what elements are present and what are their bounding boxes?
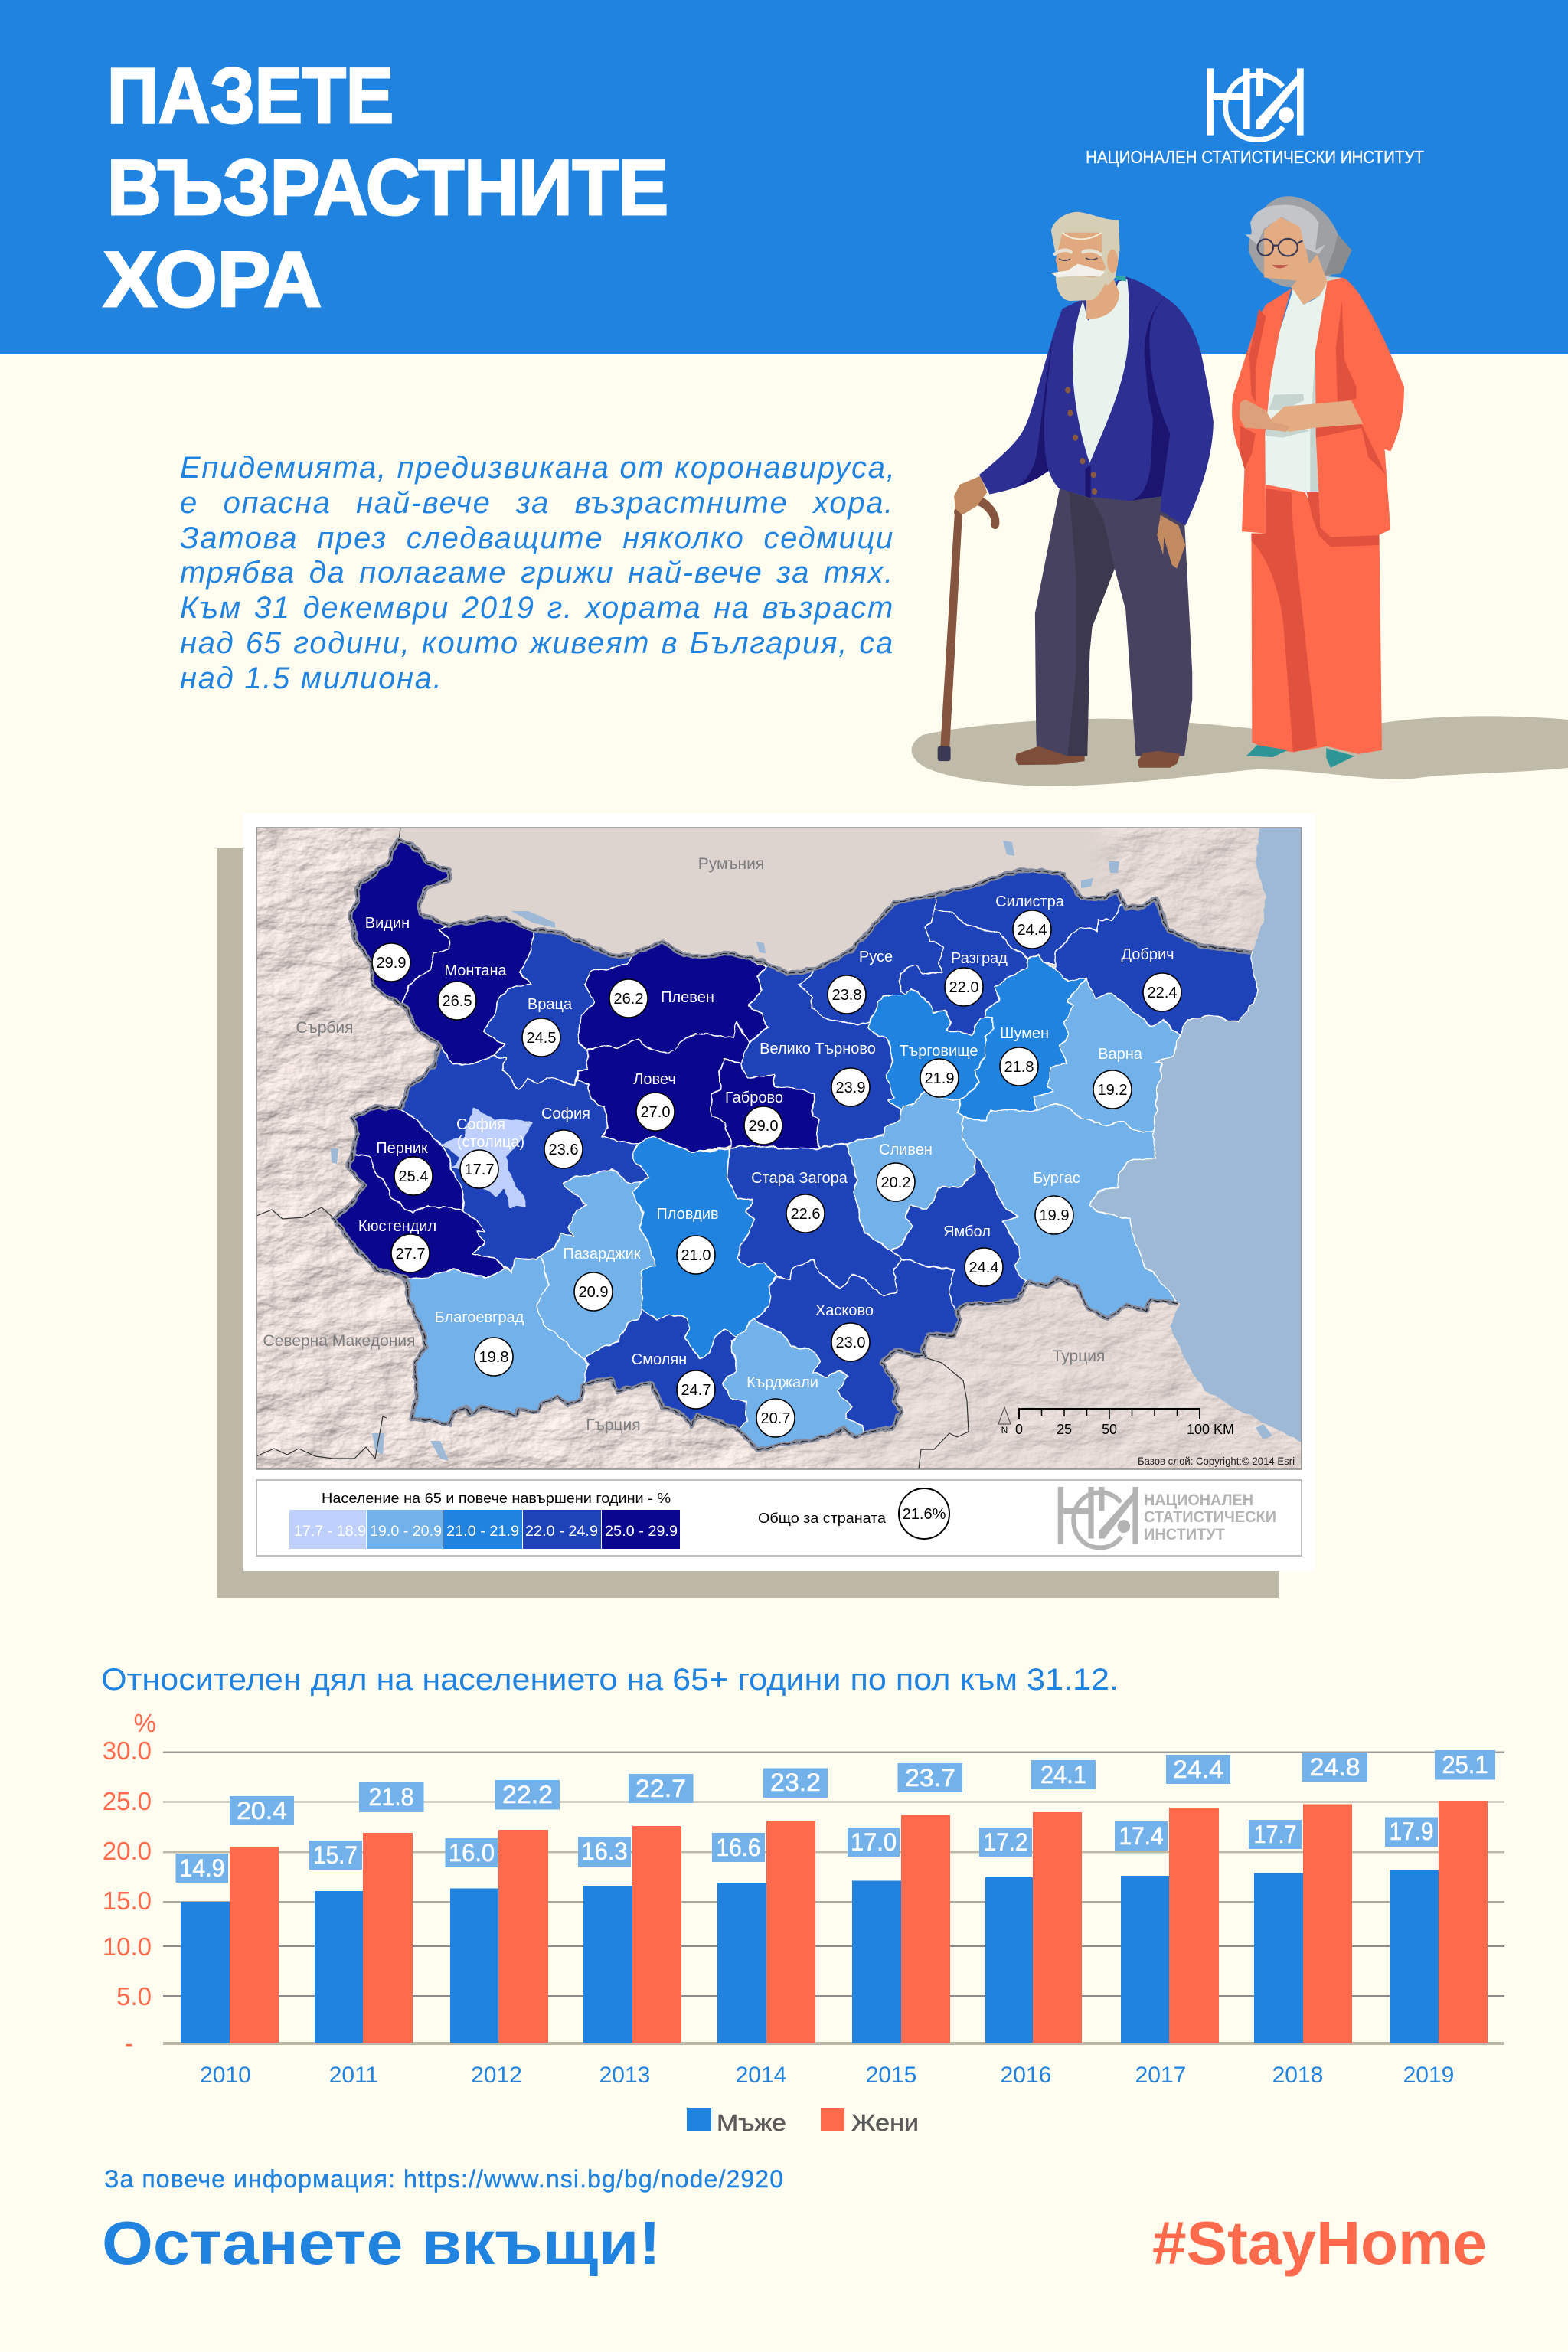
hashtag: #StayHome: [1152, 2209, 1487, 2277]
intro text block: е опасна най-вече за възрастните хора.: [180, 486, 894, 520]
region: Русе: Русе: [859, 949, 893, 965]
region: Смолян: Смолян: [632, 1351, 687, 1368]
region: Пловдив: Пловдив: [656, 1206, 719, 1223]
map: neighbouring country labels: Румъния: [698, 855, 764, 873]
logo: national statistical institute: НАЦИОНАЛЕН СТАТИСТИЧЕСКИ ИНСТИТУТ: [1086, 147, 1424, 167]
region: Благоевград: Благоевград: [435, 1309, 524, 1326]
value labels: 14.9: [179, 1854, 225, 1882]
intro text block: над 1.5 милиона.: [180, 662, 443, 695]
region: Силистра: Силистра: [995, 893, 1065, 910]
region: Перник: Перник: [376, 1140, 428, 1157]
region: Велико Търново: [760, 1040, 876, 1106]
map: neighbouring country labels: Гърция: [586, 1416, 641, 1434]
region: Перник: 25.4: [399, 1168, 428, 1185]
legend swatches: 21.0 - 21.9: [446, 1524, 519, 1540]
value labels: 21.8: [369, 1783, 413, 1811]
header band: [0, 0, 1568, 354]
region values: province labels and circles: [358, 893, 1181, 1437]
legend title: Население на 65 и повече навършени години - %: [322, 1491, 671, 1506]
value labels: 15.7: [313, 1841, 358, 1869]
value labels: 24.8: [1309, 1753, 1360, 1781]
region: Ловеч: 27.0: [641, 1104, 670, 1121]
intro text block: Към 31 декември 2019 г. хората на възраст: [180, 591, 894, 625]
map frame border: [256, 828, 1302, 1469]
icon: elderly man with cane: [938, 212, 1214, 768]
slogan: stay at home: Останете вкъщи!: [102, 2209, 661, 2277]
region: Монтана: [438, 962, 508, 1020]
y axis labels: 10.0: [103, 1932, 152, 1961]
value labels: 17.4: [1119, 1822, 1164, 1850]
region: Бургас: 19.9: [1040, 1207, 1069, 1224]
region: Плевен: [609, 979, 714, 1018]
region: София столица: (столица): [457, 1134, 524, 1151]
region: Търговище: 21.9: [925, 1070, 954, 1087]
national total: [758, 1488, 949, 1539]
region: Ямбол: [943, 1223, 1003, 1286]
map: national border: [334, 840, 1253, 1449]
x axis years: 2014: [736, 2063, 786, 2088]
region: Кърджали: [746, 1374, 818, 1437]
icon: elderly woman: [1232, 196, 1404, 768]
scale bar and north arrow: 100 KM: [1187, 1422, 1234, 1437]
value labels: 17.9: [1389, 1818, 1433, 1845]
region: Разград: Разград: [951, 950, 1008, 967]
region: Сливен: Сливен: [879, 1142, 933, 1158]
intro text block: над 65 години, които живеят в България, са: [180, 626, 894, 660]
value labels: 24.4: [1173, 1756, 1223, 1783]
map: neighbouring country labels: Сърбия: [296, 1019, 354, 1037]
scale bar and north arrow: 25: [1057, 1422, 1072, 1437]
value labels: 20.4: [237, 1797, 287, 1824]
national total: Общо за страната: [758, 1511, 887, 1526]
value labels: 17.7: [1254, 1821, 1297, 1848]
region: Разград: [945, 950, 1008, 1006]
region: Кюстендил: Кюстендил: [358, 1218, 436, 1235]
region: Благоевград: [435, 1309, 524, 1376]
region: Варна: 19.2: [1098, 1082, 1127, 1099]
region: София столица: [456, 1116, 524, 1188]
logo: national statistical institute: [1086, 68, 1424, 167]
region: Смолян: [632, 1351, 715, 1409]
legend swatches: 17.7 - 18.9: [294, 1524, 366, 1540]
y axis labels: 20.0: [103, 1837, 152, 1865]
title: ПАЗЕТЕ: [107, 52, 394, 139]
panel: map frame shadow: [217, 848, 1279, 1598]
grey institute logo: НАЦИОНАЛЕН: [1144, 1491, 1253, 1509]
region: Пловдив: 21.0: [681, 1247, 710, 1264]
legend swatches: 25.0 - 29.9: [605, 1524, 678, 1540]
region: Шумен: Шумен: [1000, 1025, 1049, 1042]
intro text block: [180, 451, 897, 695]
region: Сливен: 20.2: [881, 1174, 910, 1191]
region: Търговище: Търговище: [900, 1043, 978, 1060]
illustration: elderly couple: [938, 196, 1404, 768]
value labels: 24.1: [1040, 1761, 1086, 1788]
region: Ямбол: 24.4: [969, 1259, 998, 1276]
scale bar and north arrow: [998, 1407, 1234, 1437]
title: ХОРА: [103, 236, 322, 323]
region: Кюстендил: 27.7: [396, 1246, 425, 1263]
y axis labels: [103, 1709, 156, 2057]
region: Монтана: Монтана: [444, 962, 508, 979]
region: Кюстендил: [358, 1218, 436, 1272]
panel: map card: [243, 813, 1315, 1571]
region: Плевен: Плевен: [661, 989, 714, 1006]
map: neighbouring country labels: [263, 855, 1105, 1434]
value labels: 16.0: [449, 1839, 495, 1867]
map: provinces of Bulgaria: [334, 840, 1259, 1449]
value labels: [176, 1750, 1495, 1883]
region: Видин: 29.9: [377, 955, 406, 972]
grey institute logo: ИНСТИТУТ: [1144, 1526, 1225, 1544]
region: Велико Търново: 23.9: [836, 1080, 865, 1096]
value labels: 23.2: [770, 1769, 821, 1796]
title: [103, 52, 668, 323]
region: Враца: Враца: [528, 996, 573, 1013]
region: Благоевград: 19.8: [479, 1349, 508, 1366]
x axis years: 2012: [471, 2063, 522, 2088]
scale bar and north arrow: 50: [1102, 1422, 1117, 1437]
region: Силистра: 24.4: [1018, 922, 1047, 939]
region: София: София: [541, 1106, 590, 1122]
map attribution: Базов слой: Copyright:© 2014 Esri: [1138, 1455, 1295, 1467]
region: София: 23.6: [549, 1142, 578, 1158]
region: Шумен: [1000, 1025, 1049, 1086]
x axis years: 2017: [1135, 2063, 1186, 2088]
x axis years: 2018: [1272, 2063, 1323, 2088]
chart title: Относителен дял на населението на 65+ години по пол към 31.12.: [101, 1663, 1119, 1697]
map legend panel: [256, 1480, 1302, 1556]
x axis years: 2016: [1001, 2063, 1051, 2088]
region: Добрич: Добрич: [1121, 946, 1174, 963]
region: Габрово: [725, 1089, 783, 1145]
region: Стара Загора: 22.6: [791, 1206, 820, 1223]
region: Шумен: 21.8: [1004, 1059, 1034, 1076]
value labels: 22.2: [502, 1781, 553, 1808]
grey institute logo: [1058, 1487, 1276, 1547]
value labels: 23.7: [905, 1764, 956, 1792]
x axis years: [200, 2063, 1454, 2088]
bars: [181, 1801, 1488, 2043]
region: Стара Загора: [751, 1170, 848, 1233]
value labels: 16.6: [717, 1834, 761, 1861]
x axis years: 2013: [599, 2063, 650, 2088]
y axis labels: %: [134, 1709, 156, 1737]
ground shadow: [912, 716, 1568, 786]
x axis years: 2010: [200, 2063, 251, 2088]
legend swatches: 22.0 - 24.9: [525, 1524, 598, 1540]
map base: land, relief and sea: [257, 828, 1302, 1468]
intro text block: трябва да полагаме грижи най-вече за тях.: [180, 556, 894, 590]
region: Хасково: 23.0: [836, 1334, 865, 1351]
region: Русе: [828, 949, 893, 1014]
region: Добрич: 22.4: [1148, 985, 1177, 1001]
y axis labels: 15.0: [103, 1886, 152, 1915]
legend swatches: 19.0 - 20.9: [370, 1524, 442, 1540]
region: Бургас: Бургас: [1033, 1170, 1080, 1187]
region: Пловдив: [656, 1206, 719, 1274]
region: Стара Загора: Стара Загора: [751, 1170, 848, 1187]
region: Хасково: Хасково: [815, 1302, 874, 1319]
region: Пазарджик: 20.9: [579, 1284, 608, 1301]
map: neighbouring country labels: Турция: [1053, 1348, 1105, 1365]
y axis labels: 30.0: [103, 1736, 152, 1765]
region: Варна: Варна: [1098, 1046, 1143, 1063]
region: Плевен: 26.2: [614, 991, 643, 1008]
x axis years: 2019: [1403, 2063, 1454, 2088]
chart legend: [687, 2108, 919, 2136]
region: Ловеч: Ловеч: [633, 1071, 676, 1088]
region: Ловеч: [633, 1071, 676, 1131]
region: Сливен: [877, 1142, 933, 1201]
value labels: 17.2: [983, 1828, 1027, 1856]
more information link: За повече информация: https://www.nsi.bg/bg/node/2920: [104, 2165, 783, 2193]
intro text block: Затова през следващите няколко седмици: [180, 521, 894, 555]
region: Габрово: Габрово: [725, 1089, 783, 1106]
value labels: 16.3: [582, 1838, 628, 1865]
legend swatches: [289, 1510, 680, 1549]
region: Разград: 22.0: [949, 979, 978, 996]
region: Русе: 23.8: [832, 987, 861, 1004]
region: София столица: 17.7: [465, 1161, 494, 1178]
region: Монтана: 26.5: [443, 993, 472, 1010]
y axis labels: 25.0: [103, 1787, 152, 1815]
region: Кърджали: 20.7: [761, 1410, 790, 1427]
region: Враца: 24.5: [527, 1030, 556, 1047]
region: Враца: [522, 996, 573, 1057]
chart legend: Жени: [851, 2109, 919, 2136]
bar chart: share of 65+ population by sex: [103, 1709, 1504, 2088]
x axis years: 2011: [329, 2063, 378, 2088]
region: Перник: [376, 1140, 433, 1195]
scale bar and north arrow: 0: [1015, 1422, 1023, 1437]
chart legend: Мъже: [717, 2109, 786, 2136]
y axis labels: -: [125, 2029, 133, 2057]
region: Габрово: 29.0: [749, 1118, 778, 1135]
region: Ямбол: Ямбол: [943, 1223, 991, 1240]
scale bar and north arrow: N: [1001, 1425, 1008, 1436]
region: Варна: [1093, 1046, 1143, 1109]
map: neighbouring country labels: Северна Македония: [263, 1332, 415, 1350]
title: ВЪЗРАСТНИТЕ: [107, 144, 668, 231]
region: Пазарджик: [563, 1246, 641, 1311]
value labels: 25.1: [1442, 1751, 1488, 1779]
region: Видин: Видин: [365, 915, 410, 932]
region: Търговище: [900, 1043, 978, 1097]
region: Добрич: [1121, 946, 1181, 1011]
region: София столица: София: [456, 1116, 505, 1133]
region: Силистра: [995, 893, 1065, 949]
region: Видин: [365, 915, 410, 982]
region: Смолян: 24.7: [681, 1382, 710, 1399]
grey institute logo: СТАТИСТИЧЕСКИ: [1144, 1508, 1276, 1526]
value labels: 22.7: [635, 1775, 686, 1802]
region: София: [541, 1106, 590, 1168]
intro text block: Епидемията, предизвикана от коронавируса,: [180, 451, 897, 485]
region: Бургас: [1033, 1170, 1080, 1234]
x axis years: 2015: [866, 2063, 916, 2088]
national total: 21.6%: [903, 1506, 946, 1523]
region: Кърджали: Кърджали: [746, 1374, 818, 1391]
value labels: 17.0: [851, 1828, 897, 1856]
region: Пазарджик: Пазарджик: [563, 1246, 641, 1263]
region: Хасково: [815, 1302, 874, 1361]
region: Велико Търново: Велико Търново: [760, 1040, 876, 1057]
y axis labels: 5.0: [116, 1982, 152, 2011]
